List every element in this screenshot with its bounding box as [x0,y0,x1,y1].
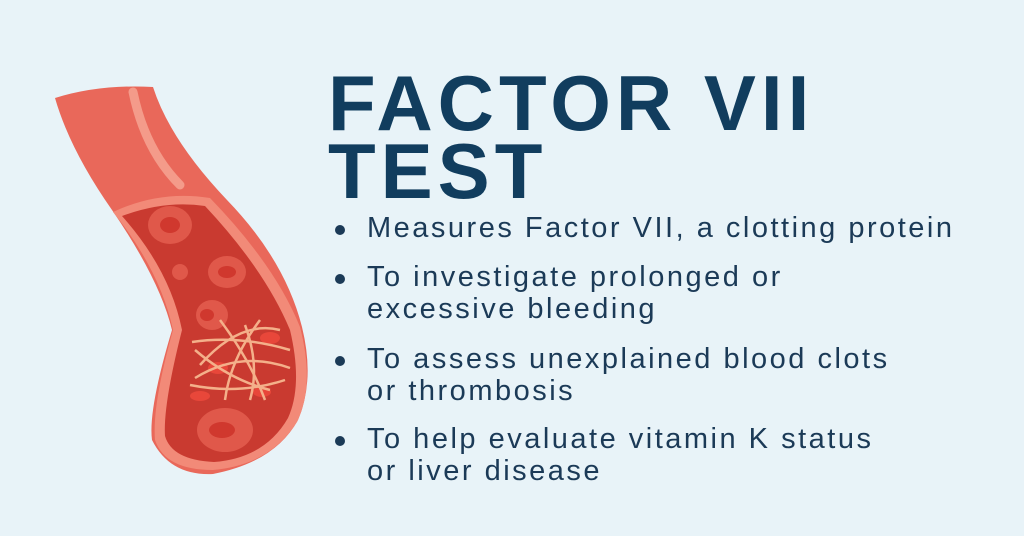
title: TEST [328,127,547,215]
title: FACTOR VII [328,59,814,147]
bullet list: Measures Factor VII, a clotting protein [367,212,954,244]
vessel interior [122,204,296,462]
bullet 3 [335,343,890,407]
bullet 2 [335,261,783,325]
bullet list: excessive bleeding [367,293,657,325]
bullet list: To assess unexplained blood clots [367,343,890,375]
fibrin mesh [190,320,290,400]
bullet list: or thrombosis [367,375,575,407]
bullet list [335,212,954,487]
bullet list: To investigate prolonged or [367,261,783,293]
illustration: blood vessel with clot [55,86,308,474]
highlight stripe [133,92,180,185]
bullet 4 [335,423,873,487]
bullet list: To help evaluate vitamin K status [367,423,873,455]
vessel outer wall [55,86,308,474]
title [328,59,814,215]
bullet 1 [335,212,954,244]
red blood cells [148,206,253,452]
bullet list: or liver disease [367,455,602,487]
cut opening rim [113,196,307,470]
